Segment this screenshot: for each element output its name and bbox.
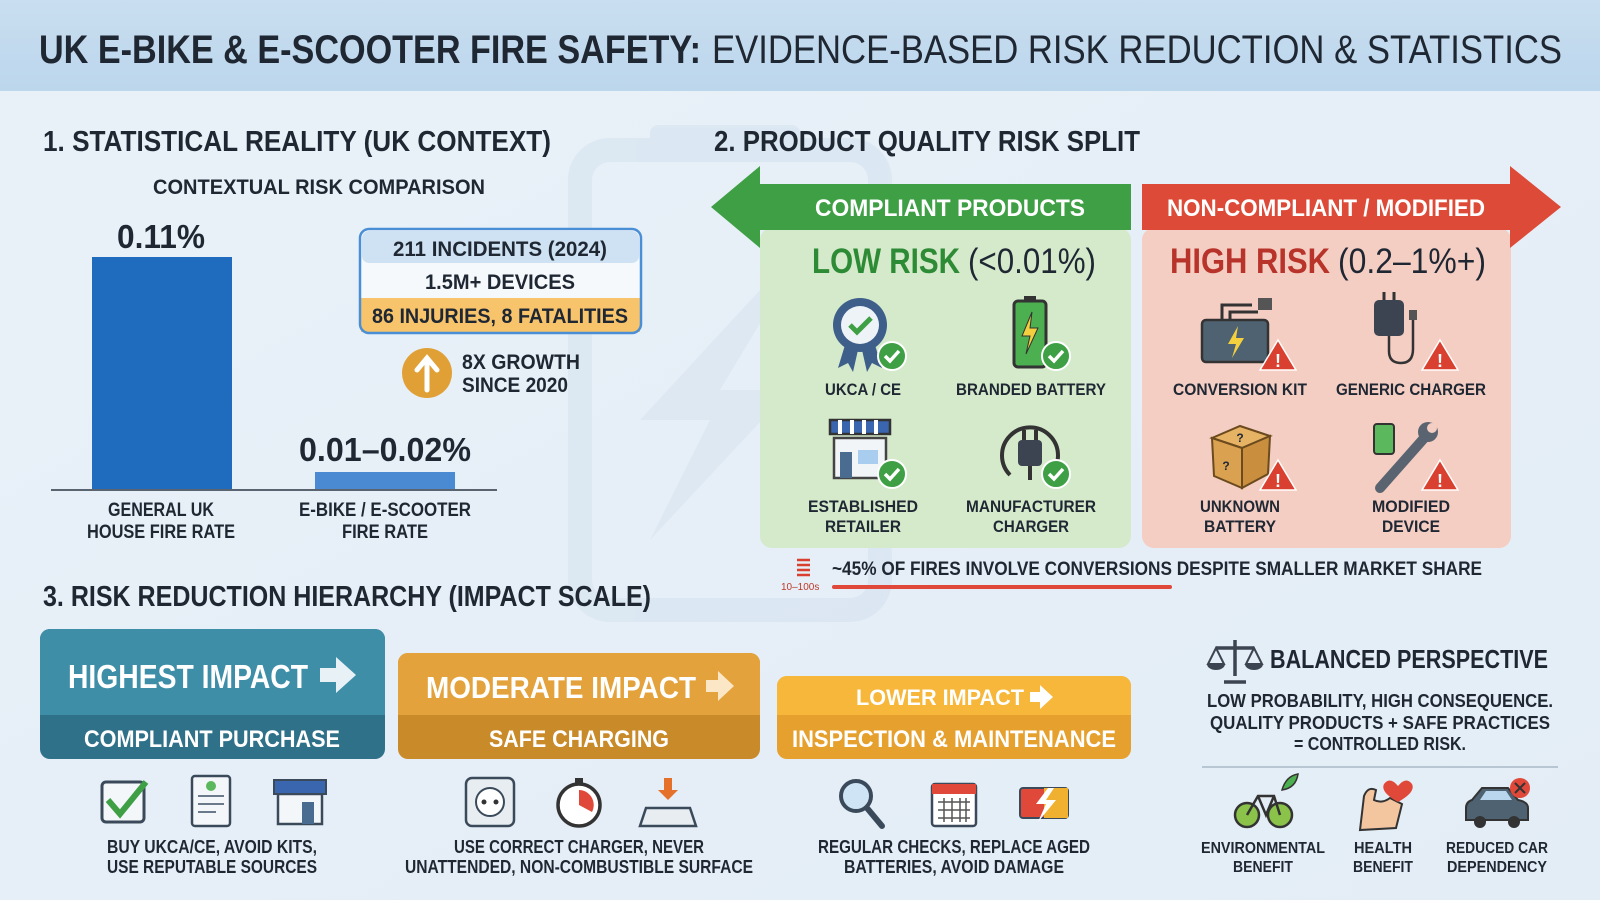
stats box: 86 INJURIES, 8 FATALITIES bbox=[372, 305, 628, 328]
icon: modified device: ! bbox=[1437, 471, 1443, 491]
panel: non-compliant products: (0.2–1%+) bbox=[1338, 242, 1486, 281]
icon: established retailer bbox=[830, 420, 906, 488]
footnote: conversions share bbox=[781, 559, 1482, 593]
panel: compliant products: RETAILER bbox=[825, 517, 901, 536]
bar chart: GENERAL UK bbox=[108, 500, 214, 521]
header band bbox=[0, 0, 1600, 91]
bar chart: HOUSE FIRE RATE bbox=[87, 522, 235, 543]
panel: non-compliant products bbox=[1142, 166, 1561, 548]
tier: moderate impact: SAFE CHARGING bbox=[489, 726, 669, 753]
icon: unknown battery: ! bbox=[1275, 471, 1281, 491]
tier 3 icons and caption: BATTERIES, AVOID DAMAGE bbox=[844, 857, 1064, 877]
icon: unknown battery: ? bbox=[1236, 431, 1244, 445]
panel: compliant products: LOW RISK bbox=[812, 242, 960, 281]
growth callout: SINCE 2020 bbox=[462, 374, 568, 397]
icon: conversion kit bbox=[1202, 298, 1296, 371]
watermark battery bbox=[580, 125, 880, 610]
panel: non-compliant products: BATTERY bbox=[1204, 517, 1277, 536]
icon: UKCA rosette bbox=[833, 298, 906, 372]
tier 3 icons and caption bbox=[818, 781, 1090, 877]
panel: non-compliant products: NON-COMPLIANT / MODIFIED bbox=[1167, 195, 1485, 222]
icon: branded battery bbox=[1014, 296, 1070, 370]
panel: compliant products bbox=[711, 166, 1131, 548]
tier: lower impact bbox=[777, 676, 1131, 759]
icon: arm heart bbox=[1360, 780, 1413, 830]
tier: lower impact: INSPECTION & MAINTENANCE bbox=[792, 726, 1116, 753]
panel: non-compliant products: MODIFIED bbox=[1372, 497, 1450, 516]
icon: unknown battery: ? bbox=[1222, 459, 1230, 473]
bar chart: 0.01–0.02% bbox=[299, 431, 471, 468]
title: UK E-BIKE & E-SCOOTER FIRE SAFETY: bbox=[39, 28, 701, 72]
tier 1 icons and caption bbox=[102, 776, 326, 877]
section 3 heading: 3. RISK REDUCTION HIERARCHY (IMPACT SCALE) bbox=[43, 581, 651, 613]
tier 1 icons and caption: BUY UKCA/CE, AVOID KITS, bbox=[107, 837, 317, 857]
footnote: conversions share: 10–100s bbox=[781, 582, 819, 593]
icon: generic charger bbox=[1374, 292, 1458, 371]
section 1 heading: 1. STATISTICAL REALITY (UK CONTEXT) bbox=[43, 126, 551, 158]
balanced perspective: QUALITY PRODUCTS + SAFE PRACTICES bbox=[1210, 713, 1550, 733]
bar chart: 0.11% bbox=[117, 218, 205, 255]
tier 1 icons and caption: USE REPUTABLE SOURCES bbox=[107, 857, 317, 877]
panel: compliant products: (<0.01%) bbox=[968, 242, 1096, 281]
panel: compliant products: MANUFACTURER bbox=[966, 497, 1096, 516]
panel: compliant products: UKCA / CE bbox=[825, 380, 901, 399]
icon: manufacturer charger bbox=[1002, 427, 1070, 488]
benefits icons: BENEFIT bbox=[1233, 859, 1293, 876]
balanced perspective bbox=[1202, 640, 1558, 767]
balanced perspective: LOW PROBABILITY, HIGH CONSEQUENCE. bbox=[1207, 691, 1553, 711]
stats box: 1.5M+ DEVICES bbox=[425, 271, 575, 294]
benefits icons bbox=[1201, 774, 1548, 876]
icon: modified device bbox=[1374, 422, 1458, 491]
tier: moderate impact: MODERATE IMPACT bbox=[426, 670, 696, 705]
footnote: conversions share: ~45% OF FIRES INVOLVE CONVERSIONS DESPITE SMALLER MARKET SHARE bbox=[832, 559, 1482, 580]
balanced perspective: BALANCED PERSPECTIVE bbox=[1270, 644, 1548, 674]
tier: highest impact: COMPLIANT PURCHASE bbox=[84, 726, 340, 753]
benefits icons: BENEFIT bbox=[1353, 859, 1413, 876]
panel: non-compliant products: HIGH RISK bbox=[1170, 242, 1330, 281]
growth callout bbox=[402, 348, 580, 398]
panel: non-compliant products: CONVERSION KIT bbox=[1173, 380, 1308, 399]
tier: highest impact bbox=[40, 629, 385, 759]
benefits icons: ENVIRONMENTAL bbox=[1201, 840, 1325, 857]
icon: scales bbox=[1207, 640, 1263, 682]
tier: highest impact: HIGHEST IMPACT bbox=[68, 658, 308, 695]
icon: unknown battery bbox=[1212, 426, 1296, 491]
icon: car bbox=[1466, 778, 1530, 828]
panel: compliant products: COMPLIANT PRODUCTS bbox=[815, 195, 1085, 222]
balanced perspective: = CONTROLLED RISK. bbox=[1294, 734, 1466, 754]
tier 3 icons and caption: REGULAR CHECKS, REPLACE AGED bbox=[818, 837, 1090, 857]
panel: non-compliant products: DEVICE bbox=[1382, 517, 1440, 536]
bar chart: E-BIKE / E-SCOOTER bbox=[299, 500, 471, 521]
benefits icons: REDUCED CAR bbox=[1446, 840, 1548, 857]
tier 2 icons and caption: USE CORRECT CHARGER, NEVER bbox=[454, 837, 704, 857]
panel: compliant products: BRANDED BATTERY bbox=[956, 380, 1107, 399]
icon: generic charger: ! bbox=[1437, 351, 1443, 371]
section 2 heading: 2. PRODUCT QUALITY RISK SPLIT bbox=[714, 126, 1140, 158]
tier 2 icons and caption bbox=[405, 778, 753, 877]
stats box: 211 INCIDENTS (2024) bbox=[393, 238, 607, 261]
panel: compliant products: ESTABLISHED bbox=[808, 497, 918, 516]
panel: non-compliant products: UNKNOWN bbox=[1200, 497, 1280, 516]
chart subtitle: CONTEXTUAL RISK COMPARISON bbox=[153, 176, 485, 199]
tier: lower impact: LOWER IMPACT bbox=[856, 685, 1025, 710]
icon: conversion kit: ! bbox=[1275, 351, 1281, 371]
growth callout: 8X GROWTH bbox=[462, 351, 580, 374]
panel: compliant products: CHARGER bbox=[993, 517, 1069, 536]
tier 2 icons and caption: UNATTENDED, NON-COMBUSTIBLE SURFACE bbox=[405, 857, 753, 877]
panel: non-compliant products: GENERIC CHARGER bbox=[1336, 380, 1486, 399]
benefits icons: HEALTH bbox=[1354, 840, 1412, 857]
tier: moderate impact bbox=[398, 653, 760, 759]
icon: bike bbox=[1235, 774, 1298, 827]
bar chart bbox=[51, 218, 497, 543]
benefits icons: DEPENDENCY bbox=[1447, 859, 1547, 876]
stats box bbox=[360, 229, 641, 333]
bar chart: FIRE RATE bbox=[342, 522, 428, 543]
